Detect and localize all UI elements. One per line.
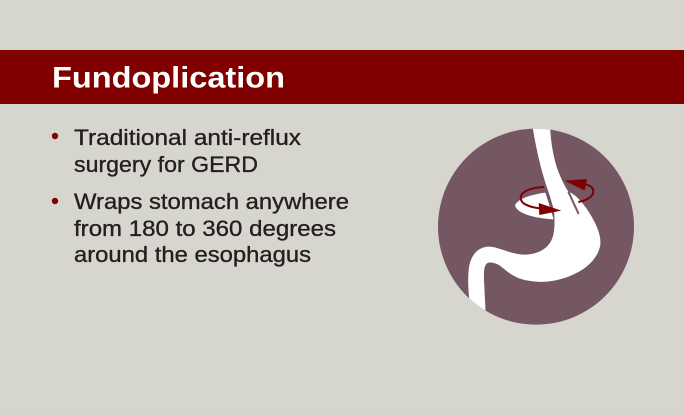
- bullet list: [52, 125, 349, 267]
- arrow: rotation back: [521, 187, 561, 215]
- left wrap slit: [549, 204, 555, 220]
- stomach and esophagus: [468, 125, 600, 320]
- circle backdrop: [438, 129, 634, 325]
- right wrap slit: [568, 192, 579, 214]
- bullet: traditional surgery: surgery for GERD: [74, 152, 258, 177]
- bullet: wraps stomach: from 180 to 360 degrees: [74, 216, 336, 241]
- bullet: traditional surgery: [52, 125, 301, 177]
- title: Fundoplication: [52, 62, 285, 94]
- arrow: rotation front: [564, 179, 593, 202]
- bullet: wraps stomach: [52, 189, 349, 267]
- bullet: wraps stomach: Wraps stomach anywhere: [74, 189, 349, 214]
- bullet: wraps stomach: around the esophagus: [74, 242, 311, 267]
- bullet: traditional surgery: Traditional anti-reflux: [74, 125, 301, 150]
- wrap flap: [515, 193, 554, 219]
- title banner: [0, 50, 684, 104]
- stomach diagram: [438, 125, 634, 325]
